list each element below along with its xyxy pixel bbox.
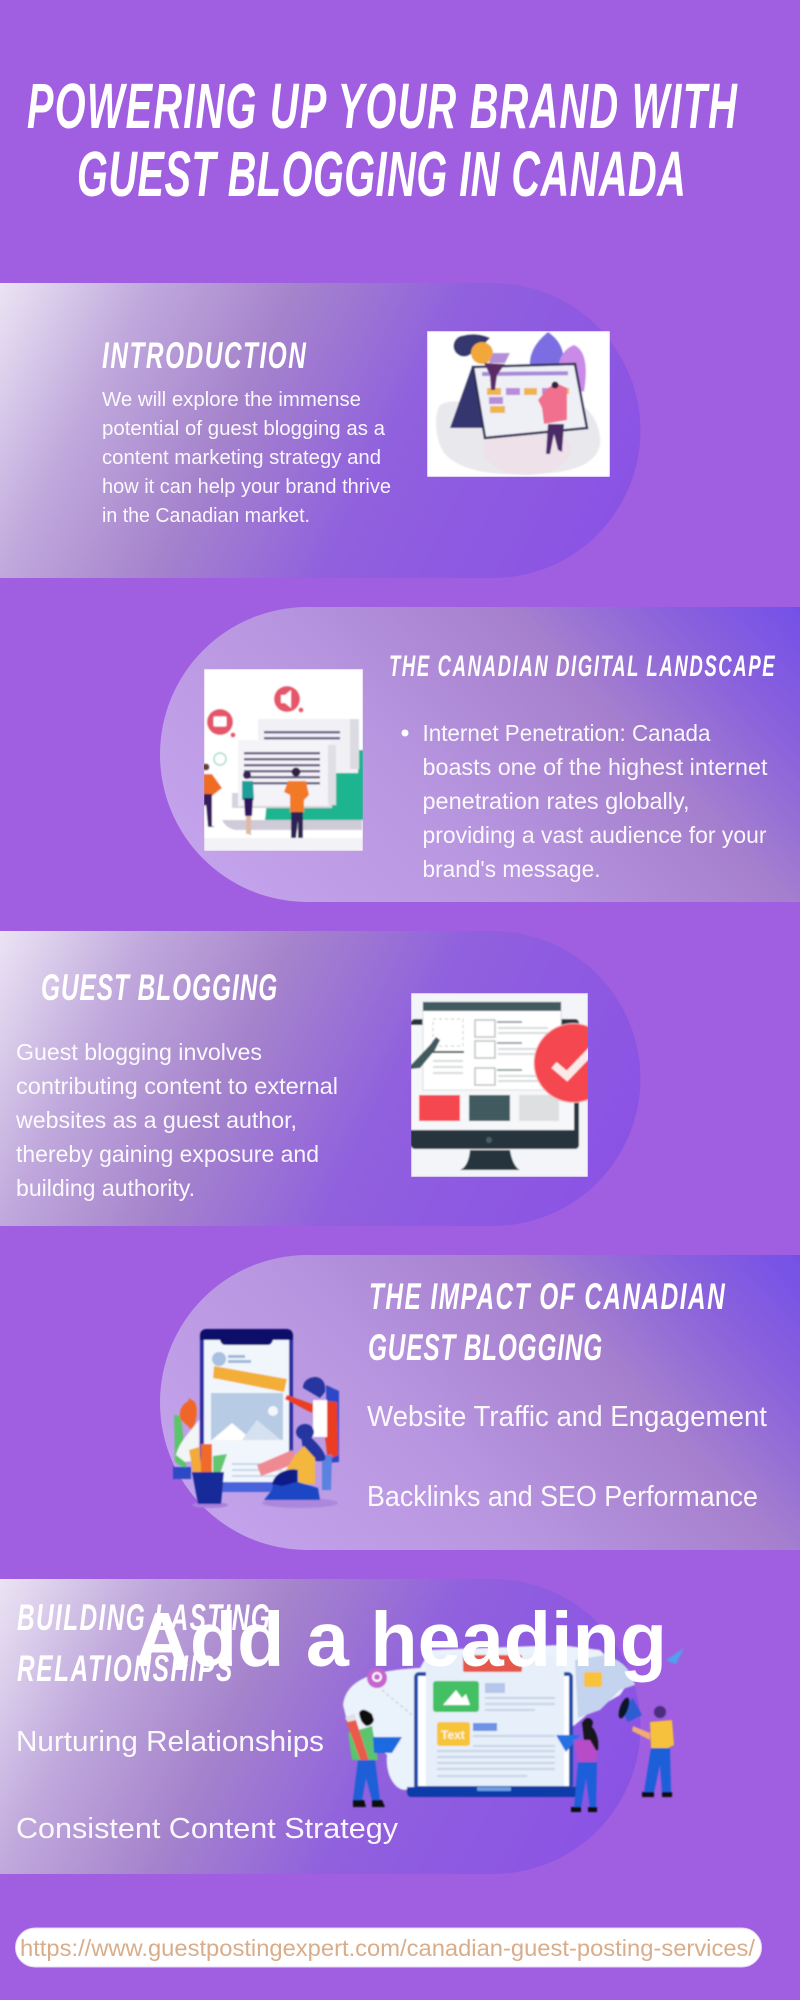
- heading: guest blogging: GUEST BLOGGING: [41, 967, 277, 1008]
- text block: introduction body: how it can help your brand thrive: [102, 476, 391, 498]
- url pill: [16, 1928, 762, 1967]
- panel: introduction: [0, 283, 640, 578]
- text block: internet penetration: providing a vast audience for your: [422, 822, 767, 848]
- text block: introduction body: content marketing strategy and: [102, 447, 381, 469]
- text block: guest blogging body: contributing content to external: [16, 1073, 338, 1099]
- text block: introduction body: We will explore the immense: [102, 389, 361, 411]
- icon: monitor with checkmark illustration: [411, 993, 588, 1177]
- icon: team reading documents illustration: [202, 669, 363, 851]
- overlay heading: add a heading: Add a heading: [134, 1597, 667, 1683]
- text: nurturing relationships: Nurturing Relationships: [16, 1726, 324, 1758]
- heading: building lasting relationships: [17, 1597, 270, 1689]
- title: POWERING UP YOUR BRAND WITH: [27, 72, 738, 142]
- panel: building lasting relationships: [0, 1579, 684, 1874]
- text block: introduction body: potential of guest blogging as a: [102, 418, 386, 440]
- text: website traffic and engagement: Website Traffic and Engagement: [367, 1401, 767, 1433]
- text block: introduction body: [102, 389, 391, 527]
- text: url: https://www.guestpostingexpert.com/canadian-guest-posting-services/: [20, 1935, 755, 1961]
- heading: impact: THE IMPACT OF CANADIAN: [369, 1276, 726, 1317]
- title: GUEST BLOGGING IN CANADA: [77, 140, 686, 210]
- heading: impact: [368, 1276, 726, 1368]
- icon: bullet: [402, 730, 408, 736]
- panel: impact of canadian guest blogging: [160, 1255, 800, 1550]
- text block: introduction body: in the Canadian market.: [102, 505, 310, 527]
- text block: guest blogging body: websites as a guest author,: [15, 1107, 297, 1133]
- text block: internet penetration: Internet Penetration: Canada: [422, 720, 711, 746]
- text block: internet penetration: boasts one of the highest internet: [422, 754, 768, 780]
- text block: guest blogging body: thereby gaining exposure and: [16, 1141, 319, 1167]
- heading: canadian digital landscape: THE CANADIAN DIGITAL LANDSCAPE: [389, 650, 776, 683]
- text block: guest blogging body: Guest blogging involves: [16, 1039, 262, 1065]
- text block: guest blogging body: [15, 1039, 338, 1201]
- icon: calendar board illustration: [427, 331, 610, 477]
- text block: internet penetration: penetration rates globally,: [422, 788, 690, 814]
- heading: building lasting relationships: RELATIONSHIPS: [17, 1648, 232, 1689]
- text block: guest blogging body: building authority.: [16, 1175, 195, 1201]
- icon: phone with people illustration: [173, 1329, 339, 1508]
- text block: internet penetration: [422, 720, 768, 882]
- text block: internet penetration: brand's message.: [422, 856, 600, 882]
- text: laptop badge: Text: [441, 1728, 465, 1742]
- icon: laptop with team illustration: [343, 1645, 684, 1812]
- heading: impact: GUEST BLOGGING: [368, 1327, 602, 1368]
- text: consistent content strategy: Consistent Content Strategy: [16, 1813, 399, 1845]
- heading: introduction: INTRODUCTION: [102, 335, 307, 376]
- panel: guest blogging: [0, 931, 640, 1226]
- title: [27, 72, 738, 210]
- text: backlinks and seo performance: Backlinks and SEO Performance: [367, 1481, 758, 1513]
- panel: the canadian digital landscape: [160, 607, 800, 902]
- heading: building lasting relationships: BUILDING LASTING: [17, 1597, 270, 1638]
